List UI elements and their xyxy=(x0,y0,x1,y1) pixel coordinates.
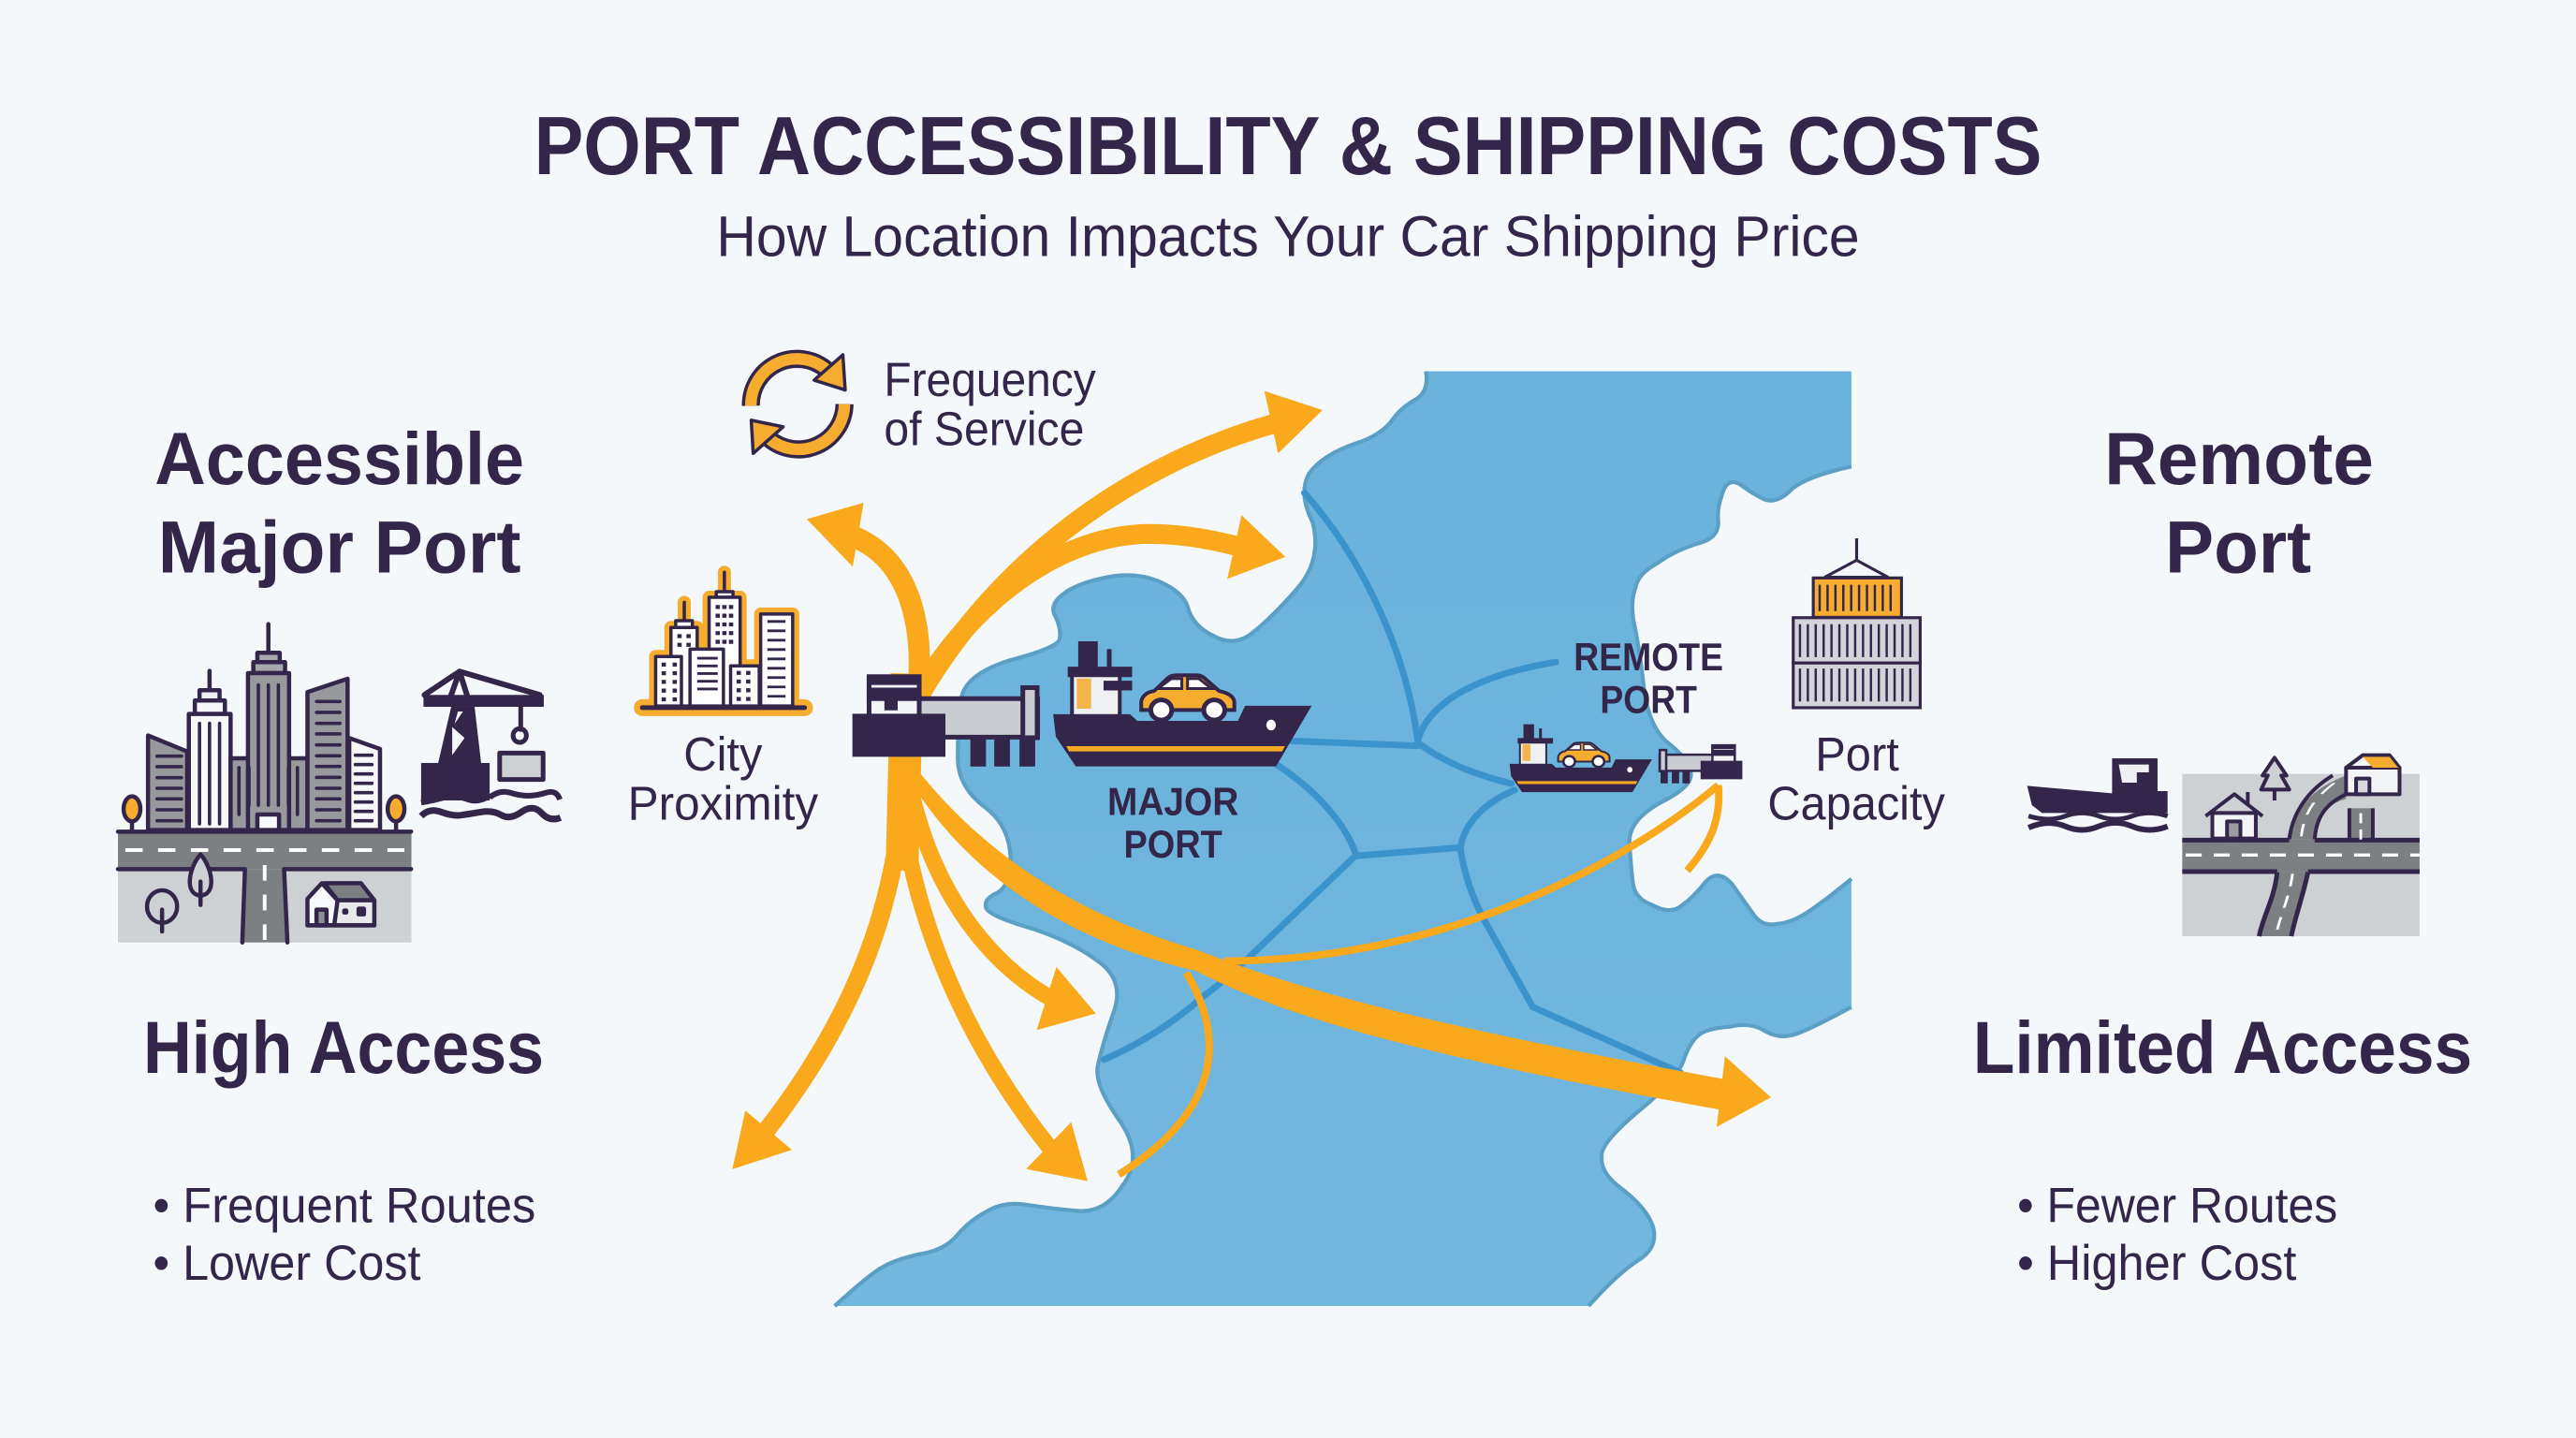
illustration: remote road and houses xyxy=(2182,756,2420,936)
map: sea and coastline xyxy=(835,372,1852,1306)
label: city proximity xyxy=(628,727,819,830)
icon: major port pier xyxy=(855,677,1038,764)
label: major port: PORT xyxy=(1124,822,1222,866)
label: frequency of service xyxy=(884,353,1096,456)
label: port capacity xyxy=(1767,727,1945,830)
roadside trees xyxy=(147,855,212,932)
title: PORT ACCESSIBILITY & SHIPPING COSTS xyxy=(534,100,2042,192)
arrow: north-west xyxy=(807,503,919,723)
illustration: city with roads xyxy=(118,624,412,943)
arrow: south-west xyxy=(732,772,903,1169)
left house xyxy=(2205,792,2262,839)
icon: small cargo ship with car xyxy=(1511,726,1650,791)
label: frequency of service: of Service xyxy=(884,403,1084,456)
list: accessible port benefits: • Frequent Routes xyxy=(153,1179,535,1234)
label: port capacity: Port xyxy=(1815,727,1899,781)
heading: remote port: Remote xyxy=(2104,418,2374,500)
icon: frequency of service cycle arrows xyxy=(751,355,845,453)
house xyxy=(307,883,374,925)
shipping routes: blue network xyxy=(1104,492,1680,1073)
tree xyxy=(2261,757,2290,800)
label: port capacity: Capacity xyxy=(1767,777,1945,830)
icon: small boat on waves xyxy=(2027,758,2168,829)
right house xyxy=(2346,756,2399,794)
icon: remote port pier xyxy=(1660,745,1741,782)
list: remote port drawbacks xyxy=(2017,1179,2337,1291)
arrow: south-south-east xyxy=(900,805,1088,1181)
thin orange routes xyxy=(1119,785,1719,1175)
list: accessible port benefits xyxy=(153,1179,535,1291)
list: remote port drawbacks: • Fewer Routes xyxy=(2017,1179,2337,1234)
icon: port crane with container xyxy=(421,671,561,819)
icon: city proximity skyline xyxy=(642,572,805,708)
label: frequency of service: Frequency xyxy=(884,353,1096,406)
label: remote port xyxy=(1573,635,1723,722)
icon: port capacity stacked containers xyxy=(1793,538,1920,708)
list: remote port drawbacks: • Higher Cost xyxy=(2017,1236,2297,1291)
arrow: long south-east to remote coast xyxy=(897,742,1771,1127)
arrow: east xyxy=(933,515,1285,670)
label: major port xyxy=(1107,779,1238,866)
building: left wedge xyxy=(148,736,187,830)
heading: accessible major port: Accessible xyxy=(154,418,524,500)
heading: accessible major port: Major Port xyxy=(158,506,521,589)
heading: limited access: Limited Access xyxy=(1973,1006,2472,1089)
arrow: short south-east xyxy=(907,772,1096,1030)
arrow: north-east xyxy=(914,391,1323,707)
building: central skyscraper xyxy=(230,624,307,830)
orange arrows radiating from major port xyxy=(732,391,1771,1181)
heading: accessible major port xyxy=(154,418,524,589)
arrow trunk at port xyxy=(902,673,907,871)
heading: remote port xyxy=(2104,418,2374,589)
list: accessible port benefits: • Lower Cost xyxy=(153,1236,421,1291)
label: city proximity: Proximity xyxy=(628,777,819,830)
label: city proximity: City xyxy=(683,727,763,781)
heading: high access: High Access xyxy=(143,1006,544,1089)
subtitle: How Location Impacts Your Car Shipping Price xyxy=(716,205,1860,270)
label: remote port: PORT xyxy=(1600,678,1697,722)
orange street trees xyxy=(124,797,404,831)
label: remote port: REMOTE xyxy=(1573,635,1723,679)
label: major port: MAJOR xyxy=(1107,779,1238,823)
icon: large cargo ship with car xyxy=(1055,643,1309,765)
heading: remote port: Port xyxy=(2165,506,2311,589)
building: right wedge xyxy=(307,679,347,830)
building: right low xyxy=(349,738,380,830)
building: white tower xyxy=(189,671,230,830)
